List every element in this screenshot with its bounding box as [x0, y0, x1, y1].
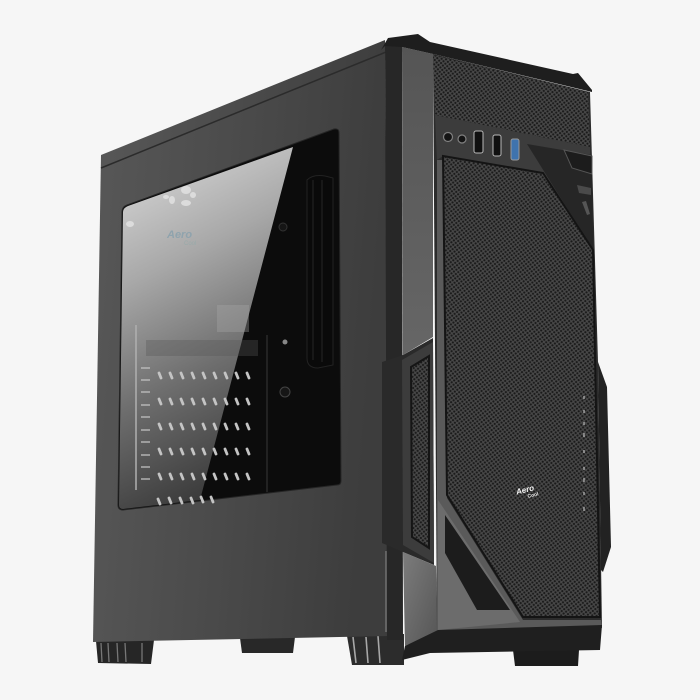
front pillar [385, 42, 438, 646]
fan logo [166, 229, 196, 247]
window interior hardware [136, 176, 333, 492]
bottom base [402, 625, 602, 660]
window [118, 129, 341, 510]
fan grille [126, 186, 196, 227]
USB ports [474, 131, 519, 160]
upper grey strip [402, 47, 433, 355]
ventilation holes [159, 373, 249, 479]
pillar dark strip [385, 42, 403, 640]
lower grey strip [403, 552, 438, 646]
main mesh [443, 156, 600, 617]
window dark glass [118, 129, 341, 510]
front logo: Aero [514, 483, 535, 497]
side panel top seam [101, 52, 386, 168]
top cap [381, 34, 592, 92]
window glass reflection [119, 147, 293, 509]
side panel edge highlights [385, 551, 387, 632]
feet [96, 634, 579, 666]
handle mesh insert [411, 356, 429, 548]
front logo [514, 483, 540, 503]
right side bulge [598, 362, 611, 572]
reset buttons [577, 185, 591, 195]
fan logo: Aero [166, 229, 192, 241]
front frame [433, 54, 602, 632]
front logo: Cool [527, 491, 540, 500]
front slot [445, 515, 510, 610]
partial hole row [158, 497, 213, 504]
fan logo: Cool [184, 241, 196, 247]
port panel [435, 115, 593, 250]
side panel [93, 40, 388, 642]
lower grey front plate [437, 160, 602, 632]
power button [564, 150, 592, 174]
side handle [382, 338, 434, 565]
mesh LED dots [583, 396, 585, 511]
audio jacks [444, 132, 466, 143]
diagonal lower plate [438, 500, 520, 630]
upper mesh [433, 55, 590, 147]
